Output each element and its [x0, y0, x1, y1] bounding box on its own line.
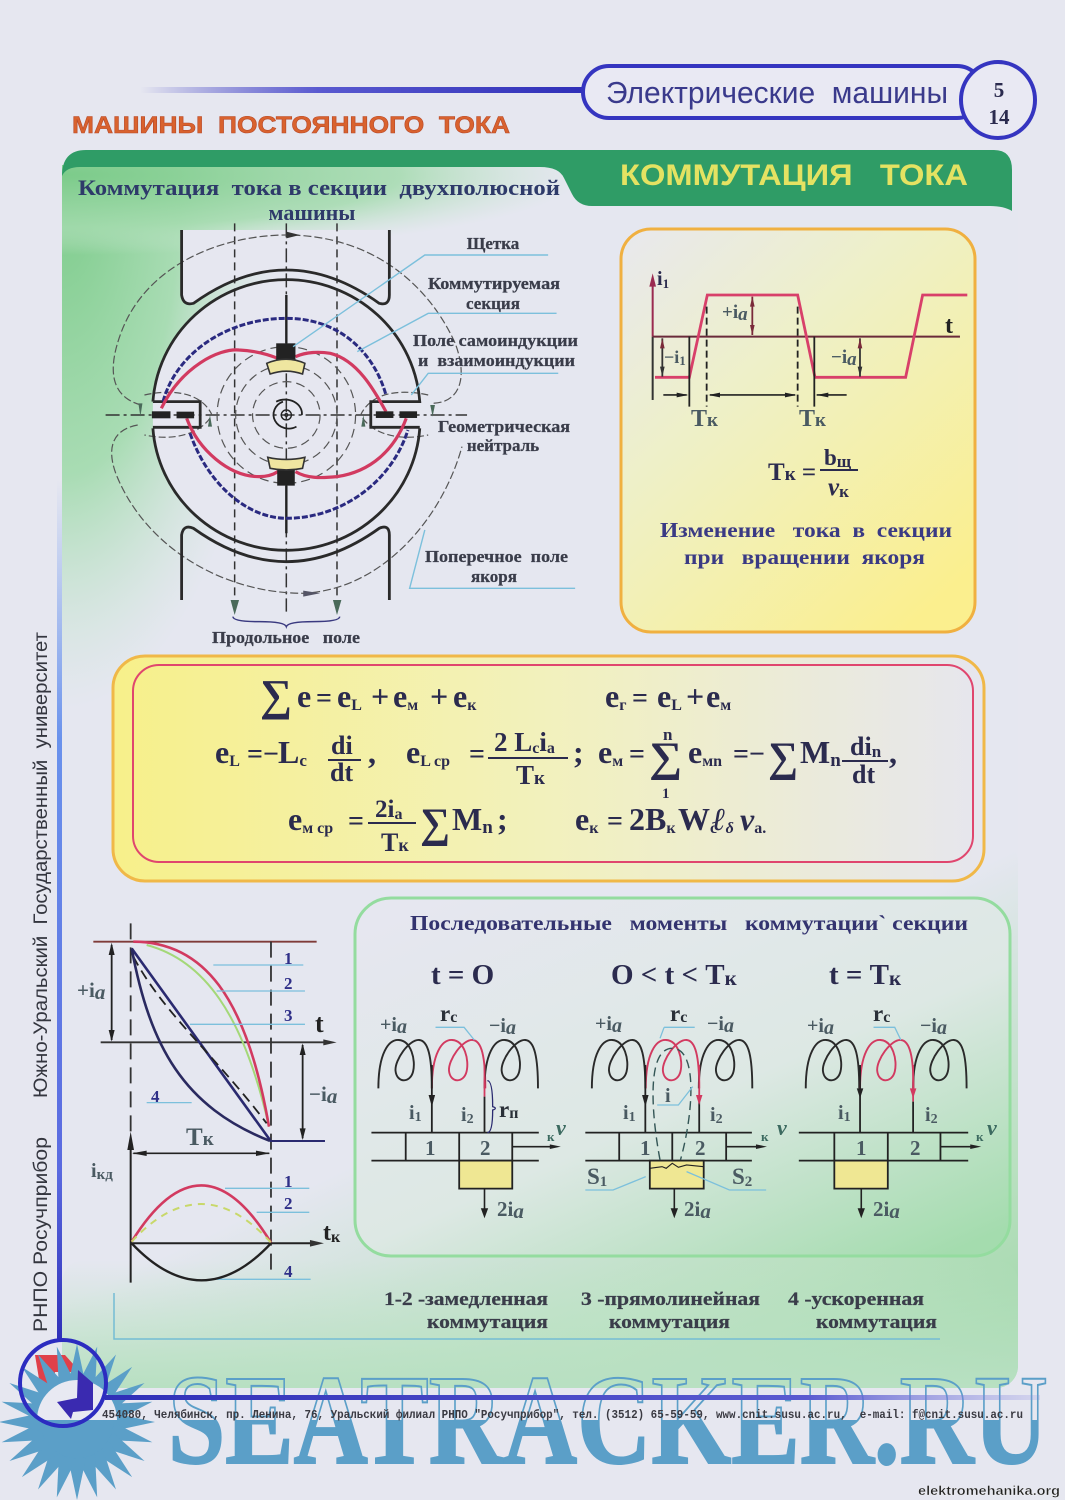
formula line 1 [260, 671, 731, 720]
moment labels: c [450, 1009, 457, 1026]
formula line 2: 1 [662, 786, 670, 802]
formula line 3: e [288, 801, 302, 837]
legend: commutation types: 1-2 -замедленная [384, 1289, 548, 1310]
moment labels: t = O [431, 959, 494, 991]
curves labels: к [331, 1229, 341, 1246]
diagram: 0 < t < Tk [585, 1027, 767, 1218]
moment labels: 1 [600, 1174, 607, 1190]
motor labels: Продольное поле [212, 628, 360, 647]
formula line 3: 2i [375, 796, 394, 823]
panel heading: Последовательные моменты коммутации` секции [410, 911, 968, 935]
moment labels: O < t < Т [611, 959, 725, 991]
green main panel [62, 150, 1018, 1388]
waveform labels: Тк [691, 406, 718, 432]
moment labels: a [824, 1017, 834, 1039]
formula line 2: L ср [420, 753, 450, 770]
legend: commutation types: коммутация [609, 1312, 730, 1333]
current curves chart [77, 923, 341, 1283]
caption: при вращении якоря [684, 545, 925, 569]
formula line 2: ∑ [649, 735, 682, 781]
waveform labels: +i [722, 302, 738, 323]
formula line 1: ∑ [260, 671, 292, 720]
moment labels: 2 [480, 1136, 490, 1160]
legend: commutation types [114, 1289, 940, 1339]
formula line 2: i [539, 727, 547, 757]
curves labels: 4 [284, 1262, 293, 1281]
motor labels: Щетка [467, 234, 520, 253]
panel: formulas [113, 656, 984, 881]
waveform labels: 1 [679, 353, 686, 368]
moment labels: i [665, 1085, 671, 1107]
formula line 3: = [607, 806, 623, 837]
top blue rule [140, 87, 585, 93]
motor labels: нейтраль [467, 436, 539, 455]
vertical publisher text [31, 632, 52, 1332]
formula line 2: м [612, 753, 623, 770]
formula line 1: м [407, 697, 418, 714]
curves labels: t [323, 1220, 331, 1246]
curves labels: кд [97, 1167, 113, 1183]
moment labels: a [612, 1015, 622, 1037]
formula line 2: , [889, 734, 897, 770]
panel title: КОММУТАЦИЯ ТОКА [620, 159, 968, 192]
formula line 2: c [532, 740, 539, 757]
waveform labels [657, 268, 953, 432]
moment labels: a [397, 1016, 407, 1038]
formula line 2: M [800, 734, 830, 770]
moment labels: 2 [910, 1136, 920, 1160]
formula line 2: , [368, 734, 376, 770]
formula line 3: ℓ [712, 801, 726, 837]
moment labels: 2 [716, 1112, 723, 1127]
motor diagram heading: Коммутация тока в секции двухполюсной [78, 175, 560, 200]
formula line 3: ; [497, 801, 508, 837]
formula line 1: e [297, 678, 311, 714]
motor labels: Коммутируемая [428, 274, 560, 293]
moment labels: r [873, 1001, 883, 1026]
formula line 2: ∑ [768, 735, 798, 781]
legend: commutation types: коммутация [816, 1312, 937, 1333]
moment labels: a [513, 1199, 524, 1223]
motor commutation diagram [106, 223, 578, 647]
formula line 3: Тк [381, 828, 409, 857]
formula line 3: M [452, 801, 482, 837]
formula line 1: + [686, 678, 704, 714]
dark green header band [62, 150, 1012, 211]
formula line 1: м [720, 697, 731, 714]
moment labels: 2i [497, 1197, 513, 1221]
curves labels: +i [77, 978, 95, 1002]
formula line 2: di [331, 731, 353, 760]
formula line 2: 2 L [494, 727, 532, 757]
formula line 2: c [299, 751, 307, 770]
moment labels: v [777, 1115, 787, 1140]
formula line 1: e [657, 678, 671, 714]
formula line 1: e [393, 678, 407, 714]
formula line 2: ; [573, 734, 584, 770]
formula line 3: c [710, 820, 717, 837]
moment labels: +i [807, 1015, 824, 1037]
formula line 1: e [337, 678, 351, 714]
formula: commutation period [768, 445, 858, 501]
formula line 3: м ср [302, 820, 333, 837]
formula line 3: к [666, 820, 676, 837]
formula line 2: n [663, 725, 673, 744]
formula line 1: e [605, 678, 619, 714]
motor labels: и взаимоиндукции [418, 351, 575, 370]
moment labels: 2 [467, 1112, 474, 1127]
formula line 2: = [469, 739, 485, 770]
moment labels: к [547, 1129, 555, 1144]
waveform labels: 1 [663, 276, 669, 291]
formula line 2: n [872, 742, 882, 761]
section heading: DC machines: МАШИНЫ ПОСТОЯННОГО ТОКА [72, 112, 510, 139]
legend: commutation types: 3 -прямолинейная [581, 1289, 760, 1310]
panel: successive commutation moments [355, 898, 1010, 1256]
formula line 1: + [430, 678, 448, 714]
formula line 2: =− [733, 739, 765, 770]
formula line 2: e [688, 734, 702, 770]
formula line 3: e [575, 801, 589, 837]
formula line 1: + [371, 678, 389, 714]
formula: commutation period: Тк = [768, 459, 816, 486]
moment labels: i [461, 1104, 467, 1126]
moment labels: +i [380, 1014, 397, 1036]
curves labels: i [91, 1160, 97, 1182]
waveform labels: t [945, 313, 953, 339]
formula line 2: e [598, 734, 612, 770]
moment labels: 2i [684, 1197, 700, 1221]
moment labels: 2 [931, 1112, 938, 1127]
formula line 3: ∑ [420, 801, 450, 847]
moment labels: к [976, 1129, 984, 1144]
motor labels: якоря [471, 567, 517, 586]
moment labels: i [710, 1104, 716, 1126]
formula line 1: e [706, 678, 720, 714]
formula line 1: к [467, 697, 477, 714]
motor labels: Геометрическая [438, 417, 570, 436]
formula line 2: e [406, 734, 420, 770]
moment labels: 1 [856, 1136, 866, 1160]
footer address: 454080, Челябинск, пр. Ленина, 76, Уральский филиал РНПО "Росучприбор", тел. (3512) 65-59-59, www.cnit.susu.ac.ru, e-mail: f@cnit.susu.ac.ru [102, 1409, 1023, 1422]
formula: commutation period: к [839, 482, 849, 501]
moment labels: 1 [415, 1110, 422, 1125]
formula line 2: мn [702, 753, 722, 770]
moment labels: к [761, 1129, 769, 1144]
formula line 2: di [850, 732, 872, 761]
moment labels: 2 [695, 1136, 706, 1160]
curves labels: a [95, 980, 105, 1004]
waveform labels: Тк [799, 406, 826, 432]
motor labels: секция [466, 294, 520, 313]
curves labels: 3 [284, 1006, 292, 1025]
formula line 3: n [482, 817, 493, 838]
curves labels: Тк [186, 1124, 214, 1151]
moment labels: r [499, 1097, 509, 1122]
moment labels: i [623, 1102, 629, 1124]
moment labels: 2i [873, 1197, 889, 1221]
moment labels: к [889, 966, 902, 990]
formula line 1: e [453, 678, 467, 714]
waveform labels: −i [664, 347, 679, 367]
formula line 3 [288, 796, 766, 857]
formula line 2: n [830, 750, 841, 771]
curves labels: t [315, 1009, 324, 1038]
curves labels: a [327, 1084, 337, 1108]
page number badge [961, 62, 1035, 138]
page number badge: 5 [994, 78, 1004, 102]
footer blue rule [105, 1395, 1040, 1400]
waveform labels: i [657, 268, 663, 290]
left blue vertical line [57, 480, 62, 1342]
motor diagram heading: машины [269, 200, 355, 225]
formula line 3: v [740, 801, 754, 837]
chapter title pill [583, 66, 983, 118]
curves labels: 2 [284, 974, 292, 993]
motor labels: Поле самоиндукции [413, 331, 578, 350]
moment labels: к [725, 966, 738, 990]
curves labels: 2 [284, 1194, 292, 1213]
moment labels: +i [595, 1013, 612, 1035]
moment labels: t = Т [829, 959, 889, 991]
moment labels: a [506, 1017, 516, 1039]
formula line 2 [215, 725, 897, 802]
formula line 1: L [351, 697, 362, 714]
moment labels: −i [707, 1013, 724, 1035]
moment labels: S [587, 1164, 600, 1189]
moment labels: 1 [629, 1110, 636, 1125]
moment labels: a [724, 1015, 734, 1037]
moment labels: a [937, 1017, 947, 1039]
publisher logo with watermark star [0, 1340, 155, 1500]
formula line 2: a [547, 740, 555, 757]
moment labels: 2 [745, 1174, 752, 1190]
legend: commutation types: 4 -ускоренная [788, 1289, 924, 1310]
motor diagram heading [78, 175, 560, 225]
vertical publisher text: Южно-Уральский Государственный университет [31, 632, 52, 1098]
motor labels: Поперечное поле [425, 547, 568, 566]
formula line 3: δ [726, 820, 734, 837]
moment labels: i [838, 1102, 844, 1124]
waveform labels: a [738, 304, 748, 325]
formula line 1: L [671, 697, 682, 714]
page number badge: 14 [988, 105, 1010, 129]
formula line 3: 2B [629, 801, 666, 837]
moment labels: i [409, 1102, 415, 1124]
formula line 3: W [678, 801, 710, 837]
formula line 2: L [229, 753, 240, 770]
formula line 3: = [348, 806, 364, 837]
formula line 2: = [629, 739, 645, 770]
moment labels: −i [920, 1015, 937, 1037]
moment labels: a [889, 1199, 900, 1223]
moment labels: a [700, 1199, 711, 1223]
formula line 1: = [632, 683, 648, 714]
formula: commutation period: щ [837, 452, 852, 471]
formula: commutation period: b [824, 445, 837, 470]
waveform labels: a [847, 349, 857, 370]
moment labels: r [440, 1001, 450, 1026]
motor labels [212, 234, 578, 647]
moment labels: п [509, 1105, 518, 1122]
formula line 2: e [215, 734, 229, 770]
motor geometry [106, 223, 575, 627]
diagram: t = 0 [371, 1027, 561, 1218]
chapter title pill: Электрические машины [606, 75, 948, 110]
vertical publisher text: РНПО Росучприбор [31, 1137, 52, 1332]
formula line 2: dt [852, 760, 875, 789]
moment labels: v [556, 1115, 566, 1140]
moment labels: −i [489, 1015, 506, 1037]
moment labels: 1 [425, 1136, 436, 1160]
moment labels: c [680, 1009, 687, 1026]
formula line 3: a. [754, 820, 766, 837]
moment diagrams [371, 1027, 981, 1218]
waveform labels: −i [831, 347, 847, 368]
current waveform chart [649, 273, 967, 407]
moment labels: 1 [640, 1136, 650, 1160]
curves labels: 1 [284, 949, 292, 968]
moment labels: S [732, 1164, 745, 1189]
formula line 2: Тк [516, 760, 545, 790]
moment labels: r [670, 1001, 680, 1026]
curves labels: 1 [284, 1172, 292, 1191]
formula line 1: = [316, 683, 332, 714]
moment labels: i [925, 1104, 931, 1126]
source credit: elektromehanika.org [918, 1483, 1060, 1498]
formula line 2: L [278, 734, 299, 770]
moment labels: v [987, 1115, 997, 1140]
curves labels [77, 949, 341, 1281]
caption [660, 518, 952, 569]
curves labels: −i [309, 1082, 327, 1106]
formula line 2: dt [330, 758, 353, 787]
panel: current change in section [621, 229, 975, 632]
moment labels: 1 [844, 1110, 851, 1125]
moment labels: c [883, 1009, 890, 1026]
formula line 1: г [619, 697, 626, 714]
diagram: t = Tk [799, 1027, 981, 1218]
moment labels [380, 959, 997, 1223]
curves labels: 4 [151, 1087, 160, 1106]
formula: commutation period: v [828, 474, 839, 501]
caption: Изменение тока в секции [660, 518, 952, 542]
formula line 3: a [394, 806, 402, 823]
formula line 3: к [589, 820, 599, 837]
formula line 2: =− [247, 739, 279, 770]
legend: commutation types: коммутация [427, 1312, 548, 1333]
